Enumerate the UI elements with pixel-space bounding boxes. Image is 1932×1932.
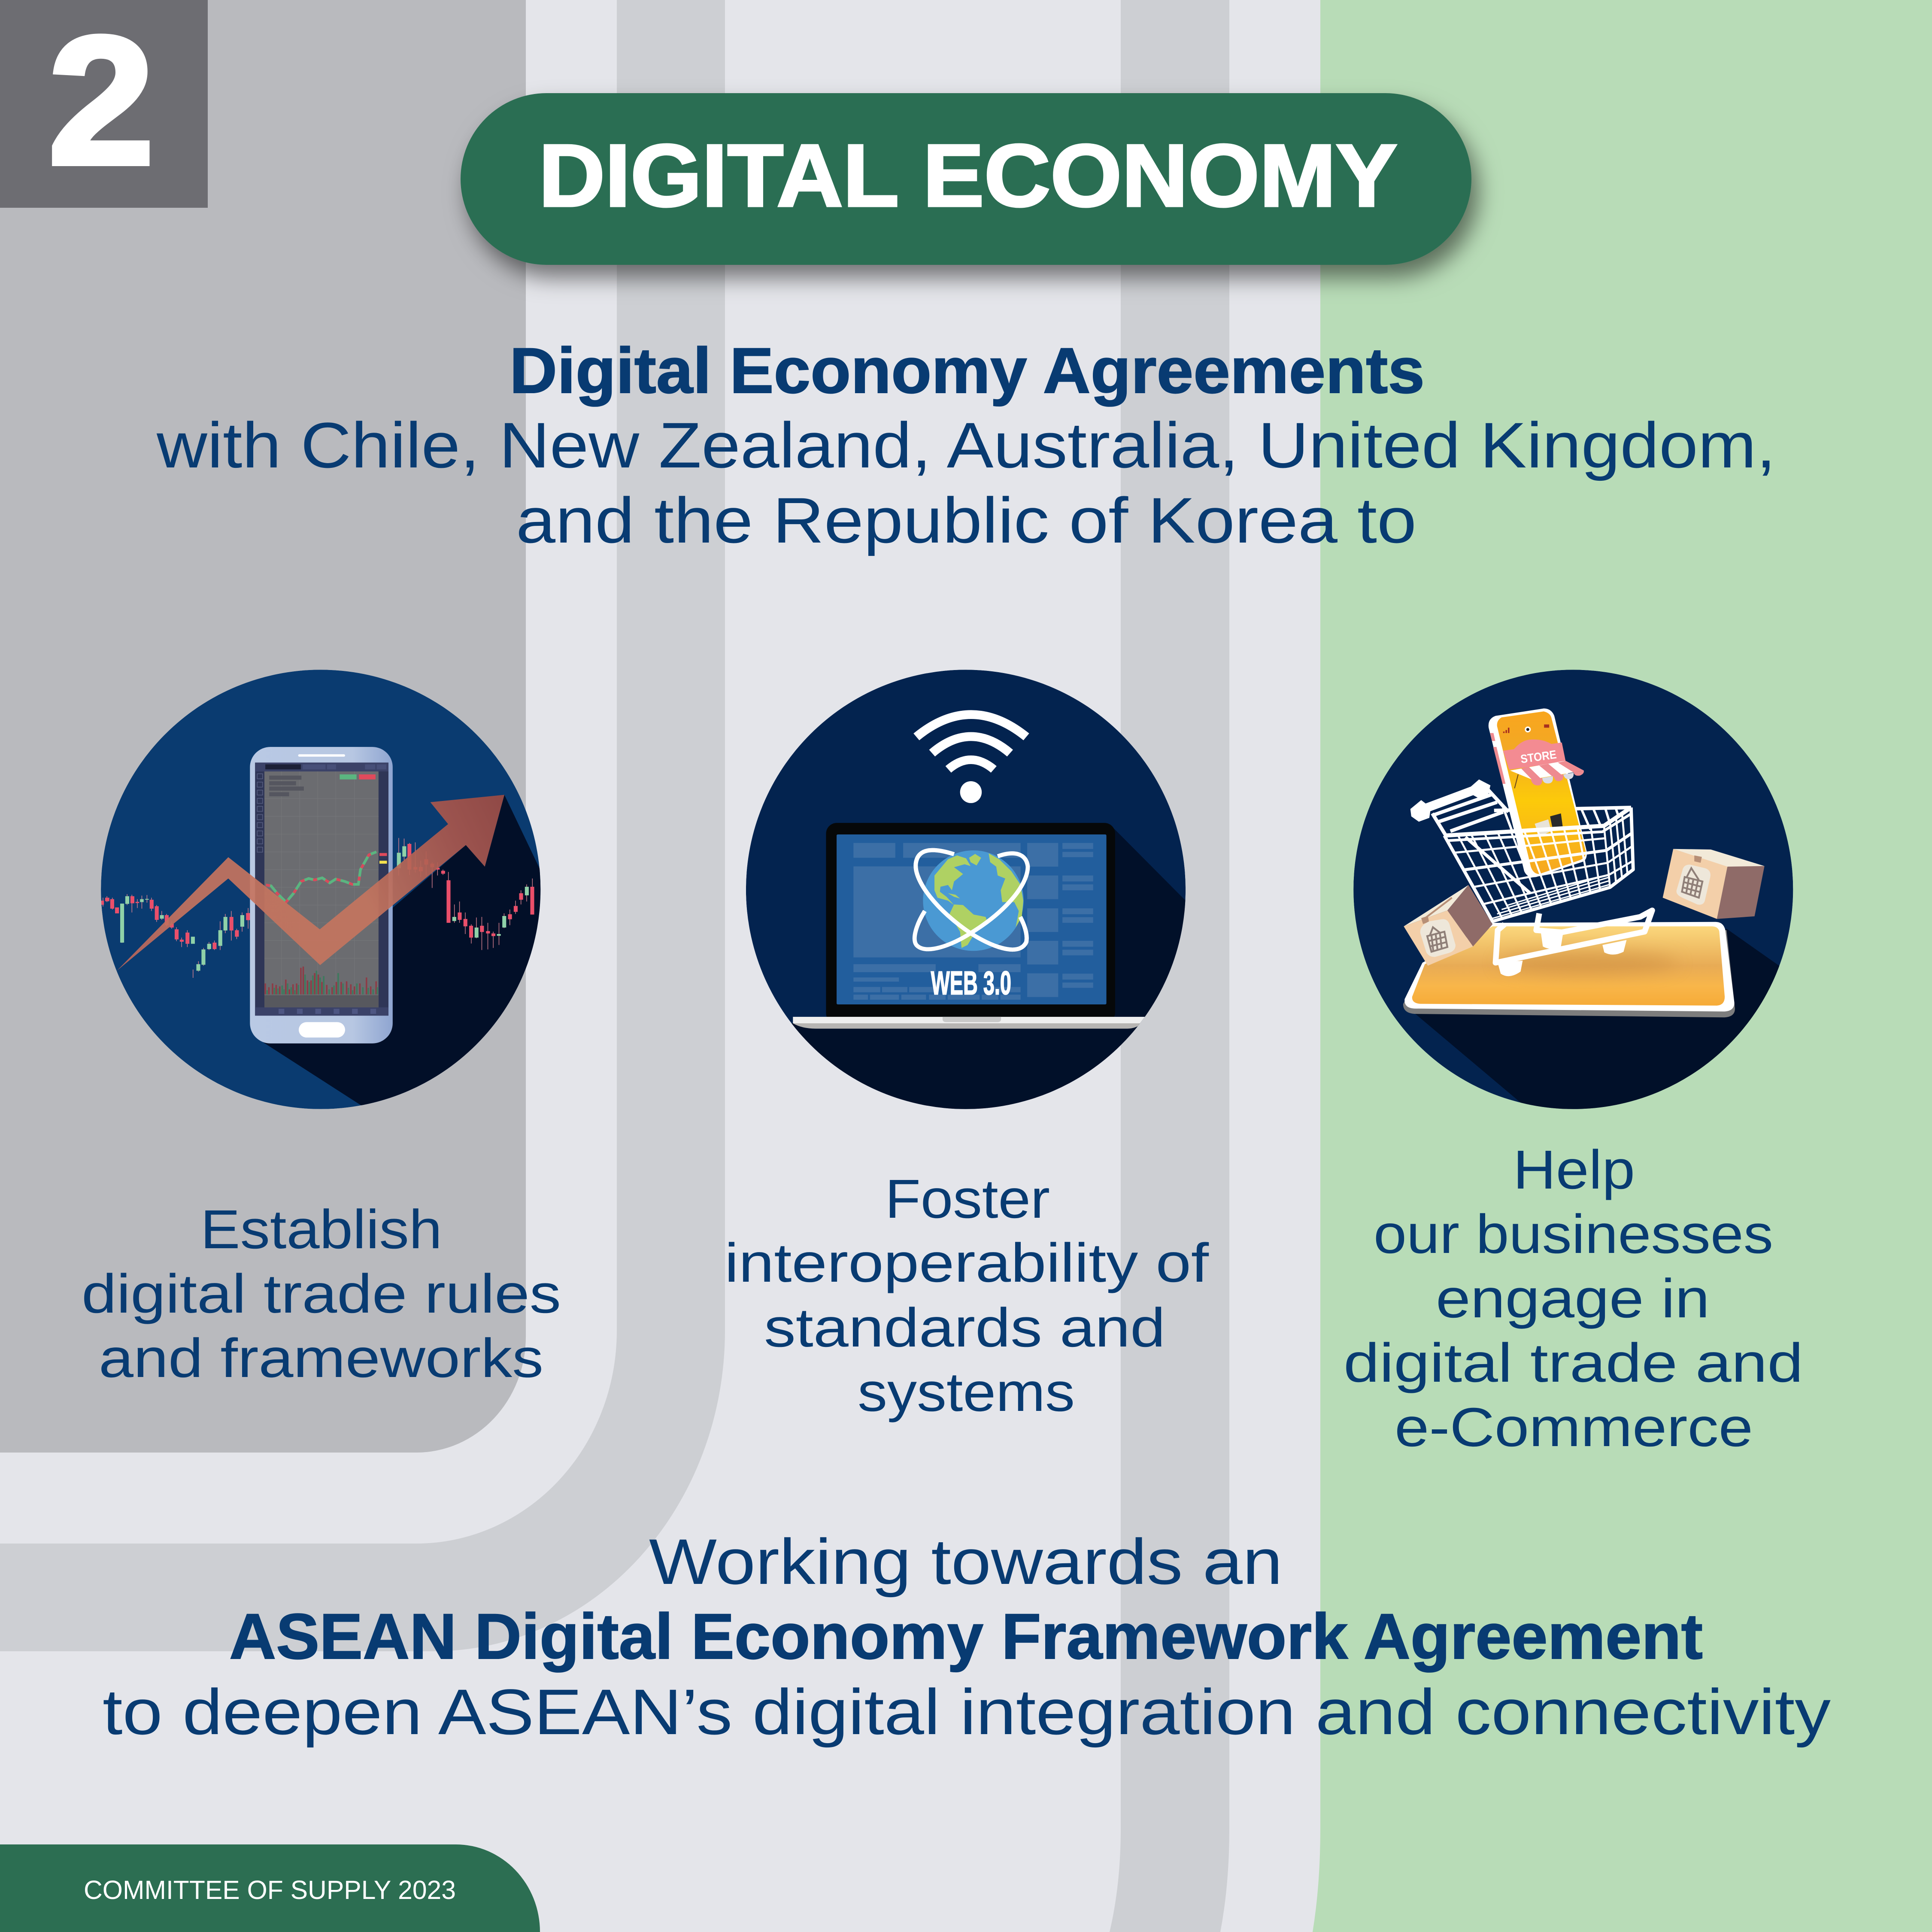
- globe: [915, 850, 1028, 951]
- background: outer left grey band: [0, 0, 725, 1651]
- caption: help our businesses: e-Commerce: [1395, 1397, 1753, 1458]
- icon: phone with trading chart: [101, 670, 567, 1130]
- caption: establish digital trade rules: Establish: [200, 1199, 442, 1260]
- laptop: [793, 823, 1146, 1028]
- closing statement: Working towards an: [649, 1526, 1283, 1598]
- footer tab: [0, 1844, 540, 1932]
- caption: foster interoperability: systems: [858, 1362, 1075, 1423]
- intro text block: Digital Economy Agreements: [510, 334, 1425, 406]
- intro text block: and the Republic of Korea to: [516, 484, 1416, 556]
- closing statement: [103, 1526, 1831, 1748]
- tablet platform: [1403, 922, 1735, 1017]
- intro text block: [156, 334, 1776, 556]
- caption: help our businesses: digital trade and: [1344, 1332, 1803, 1394]
- section number badge: 2: [48, 0, 155, 203]
- title pill: DIGITAL ECONOMY: [539, 126, 1397, 225]
- caption: establish digital trade rules: digital trade rules: [82, 1263, 561, 1325]
- phone mini chart line: [266, 852, 376, 902]
- closing statement: ASEAN Digital Economy Framework Agreement: [229, 1600, 1703, 1672]
- cart back frame and wires: [1410, 779, 1631, 836]
- wifi symbol: [916, 715, 1026, 803]
- caption: help our businesses: engage in: [1436, 1268, 1710, 1329]
- caption: help our businesses: our businesses: [1374, 1204, 1773, 1265]
- caption: establish digital trade rules: and frameworks: [99, 1328, 543, 1389]
- store phone: [1489, 709, 1587, 877]
- right parcel: [1663, 849, 1765, 919]
- caption: foster interoperability: interoperability of: [725, 1232, 1209, 1294]
- candlestick wicks: [103, 838, 532, 978]
- closing statement: to deepen ASEAN’s digital integration and connectivity: [103, 1676, 1831, 1748]
- intro text block: with Chile, New Zealand, Australia, United Kingdom,: [156, 409, 1776, 481]
- footer tab: COMMITTEE OF SUPPLY 2023: [84, 1875, 456, 1905]
- background: dark grey panel: [0, 0, 526, 1453]
- caption: foster interoperability: [725, 1168, 1209, 1423]
- icon: shopping cart with store phone: [1353, 670, 1825, 1130]
- caption: help our businesses: [1344, 1139, 1803, 1458]
- left parcel: [1404, 885, 1492, 966]
- icon: laptop with web 3.0 globe: [730, 670, 1211, 1130]
- phone body: [250, 747, 393, 1043]
- phone volume bars: [265, 967, 376, 995]
- arrow: [117, 795, 504, 971]
- background: green column: [1313, 0, 1932, 1932]
- cart undercarriage: [1495, 910, 1652, 976]
- section number badge: [0, 0, 208, 208]
- caption: establish digital trade rules: [82, 1199, 561, 1389]
- caption: help our businesses: Help: [1513, 1139, 1635, 1201]
- cart front basket wires: [1444, 807, 1633, 921]
- caption: foster interoperability: standards and: [764, 1297, 1165, 1359]
- title pill: [461, 93, 1471, 265]
- store sign label: STORE: [1520, 748, 1557, 766]
- caption: foster interoperability: Foster: [885, 1168, 1050, 1230]
- phone screen: [255, 763, 388, 1016]
- web 3.0 label: WEB 3.0: [931, 965, 1011, 1001]
- candlesticks: green: [120, 846, 529, 971]
- candlesticks: red: [101, 844, 534, 949]
- background: right grey band: [1110, 0, 1229, 1932]
